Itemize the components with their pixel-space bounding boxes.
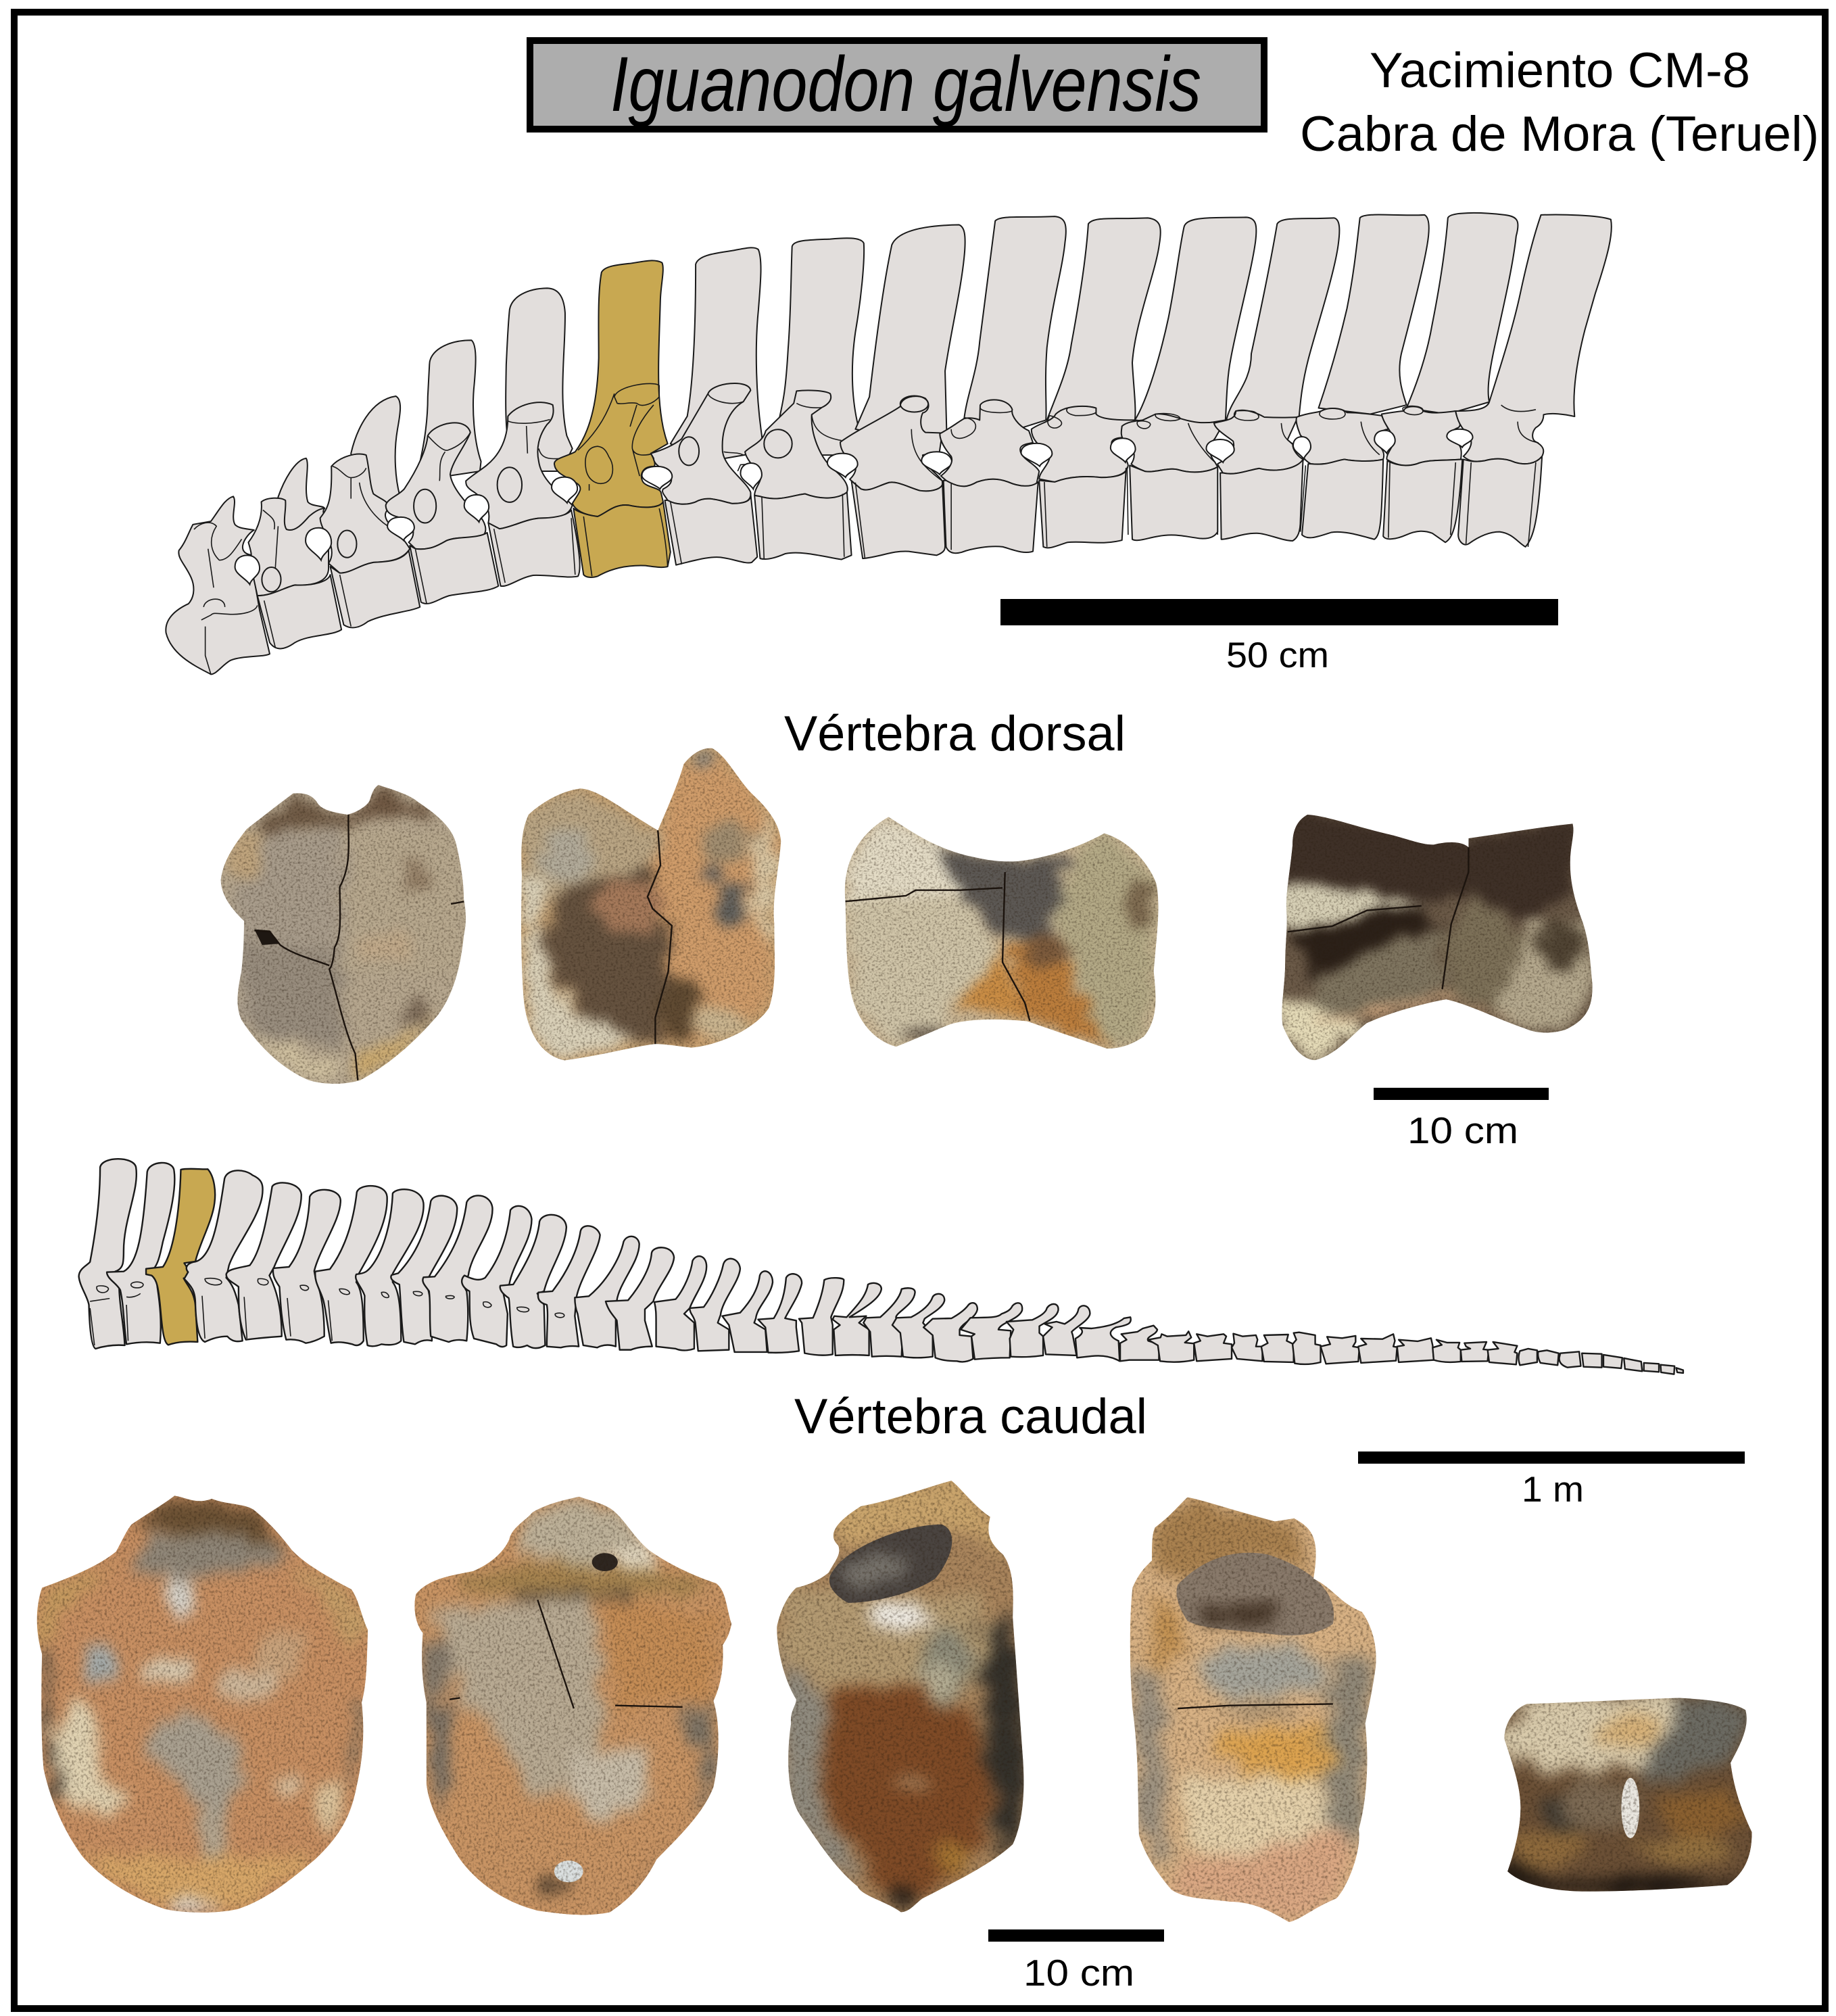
- vertebra 14: [1296, 215, 1429, 539]
- vertebra 9: [840, 225, 965, 558]
- photo: dorsal vertebra view 3: [845, 817, 1159, 1049]
- locality text: Yacimiento CM-8: [1370, 43, 1750, 98]
- caudal vertebrae 41 to 49, tail tip: [1518, 1349, 1683, 1374]
- vertebra 5: [466, 288, 580, 586]
- photo: dorsal vertebra view 4: [1278, 809, 1595, 1063]
- vertebra 10: [940, 216, 1066, 553]
- highlighted vertebra in gold: [554, 260, 671, 577]
- vertebra 2: [248, 458, 341, 648]
- intervertebral gaps 1 to 9: [235, 452, 952, 584]
- locality text: Cabra de Mora (Teruel): [1300, 107, 1819, 162]
- photo: caudal vertebra view 1: [37, 1495, 368, 1913]
- photo: caudal vertebra view 2: [414, 1497, 731, 1915]
- heading: caudal vertebra: Vértebra caudal: [794, 1389, 1147, 1444]
- intervertebral gaps 10 to 15: [1021, 429, 1473, 466]
- scale bar: 10 cm dorsal: 10 cm: [1407, 1109, 1518, 1151]
- vertebra 16: [1455, 215, 1612, 547]
- vertebra 13: [1214, 218, 1339, 541]
- caudal vertebrae 4 to 22: [184, 1170, 915, 1357]
- photo: dorsal vertebra view 1: [221, 785, 466, 1084]
- scale bar: 10 cm caudal: 10 cm: [1023, 1952, 1134, 1994]
- dorsal series drawing: [166, 213, 1612, 674]
- scale bar: 50 cm: 50 cm: [1226, 635, 1329, 675]
- caudal series drawing: [79, 1159, 1683, 1374]
- vertebra 1: [166, 496, 270, 674]
- vertebra 8: [745, 238, 864, 560]
- photo: dorsal vertebra view 2: [521, 748, 781, 1061]
- scale bar: 10 cm dorsal: [1374, 1088, 1549, 1151]
- vertebra 15: [1382, 213, 1518, 542]
- vertebra 7: [651, 247, 763, 565]
- photo: caudal vertebra view 3: [773, 1476, 1029, 1912]
- caudal vertebrae 23 to 40: [892, 1294, 1517, 1364]
- scale bar: 50 cm: [1000, 599, 1558, 675]
- highlighted caudal vertebra in gold: [146, 1169, 215, 1345]
- vertebra 12: [1121, 217, 1256, 540]
- scale bar: 1 m: 1 m: [1522, 1470, 1584, 1510]
- vertebra 4: [386, 340, 498, 604]
- photo: caudal vertebra view 4: [1130, 1497, 1376, 1922]
- heading: dorsal vertebra: Vértebra dorsal: [784, 706, 1126, 761]
- vertebra 11: [1032, 218, 1161, 548]
- caudal vertebrae 1 and 2: [79, 1159, 174, 1349]
- vertebra 3: [320, 396, 420, 627]
- title box: Iguanodon galvensis: [610, 41, 1201, 128]
- locality text: [1300, 43, 1819, 162]
- photo: caudal vertebra view 5: [1495, 1694, 1754, 1894]
- scale bar: 10 cm caudal: [988, 1929, 1164, 1994]
- scale bar: 1 m: [1358, 1451, 1745, 1510]
